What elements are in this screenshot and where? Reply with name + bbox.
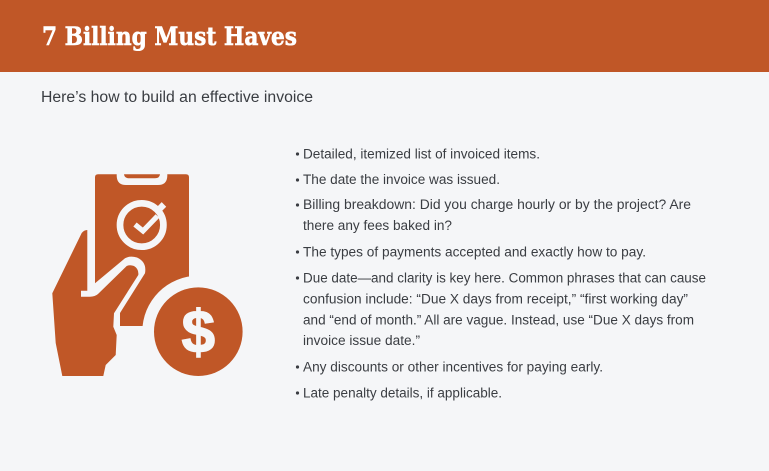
item 4: The types of payments accepted and exactly how to pay. — [303, 245, 646, 260]
item 5: invoice issue date.” — [303, 333, 420, 348]
hand — [52, 230, 138, 376]
icon: hand holding phone with dollar coin — [52, 174, 254, 388]
item 7: Late penalty details, if applicable. — [303, 386, 502, 401]
item 6: Any discounts or other incentives for paying early. — [303, 360, 603, 375]
bullet list — [296, 146, 706, 401]
item 5: confusion include: “Due X days from receipt,” “first working day” — [303, 291, 688, 306]
item 3 — [296, 197, 691, 233]
item 3: there any fees baked in? — [303, 218, 452, 233]
dollar sign: $ — [182, 298, 215, 366]
phone notch — [124, 174, 160, 178]
item 2: The date the invoice was issued. — [303, 172, 500, 187]
phone — [95, 174, 189, 326]
header banner — [0, 0, 769, 72]
subtitle: Here’s how to build an effective invoice — [41, 89, 313, 106]
coin halo — [142, 276, 254, 388]
title: 7 Billing Must Haves — [42, 22, 297, 52]
item 3: Billing breakdown: Did you charge hourly or by the project? Are — [303, 197, 691, 212]
item 1: Detailed, itemized list of invoiced items. — [303, 146, 540, 161]
check badge — [120, 202, 166, 247]
coin — [154, 287, 243, 376]
item 5 — [296, 271, 706, 348]
item 5: and “end of month.” All are vague. Instead, use “Due X days from — [303, 312, 694, 327]
item 5: Due date—and clarity is key here. Common phrases that can cause — [303, 271, 706, 286]
